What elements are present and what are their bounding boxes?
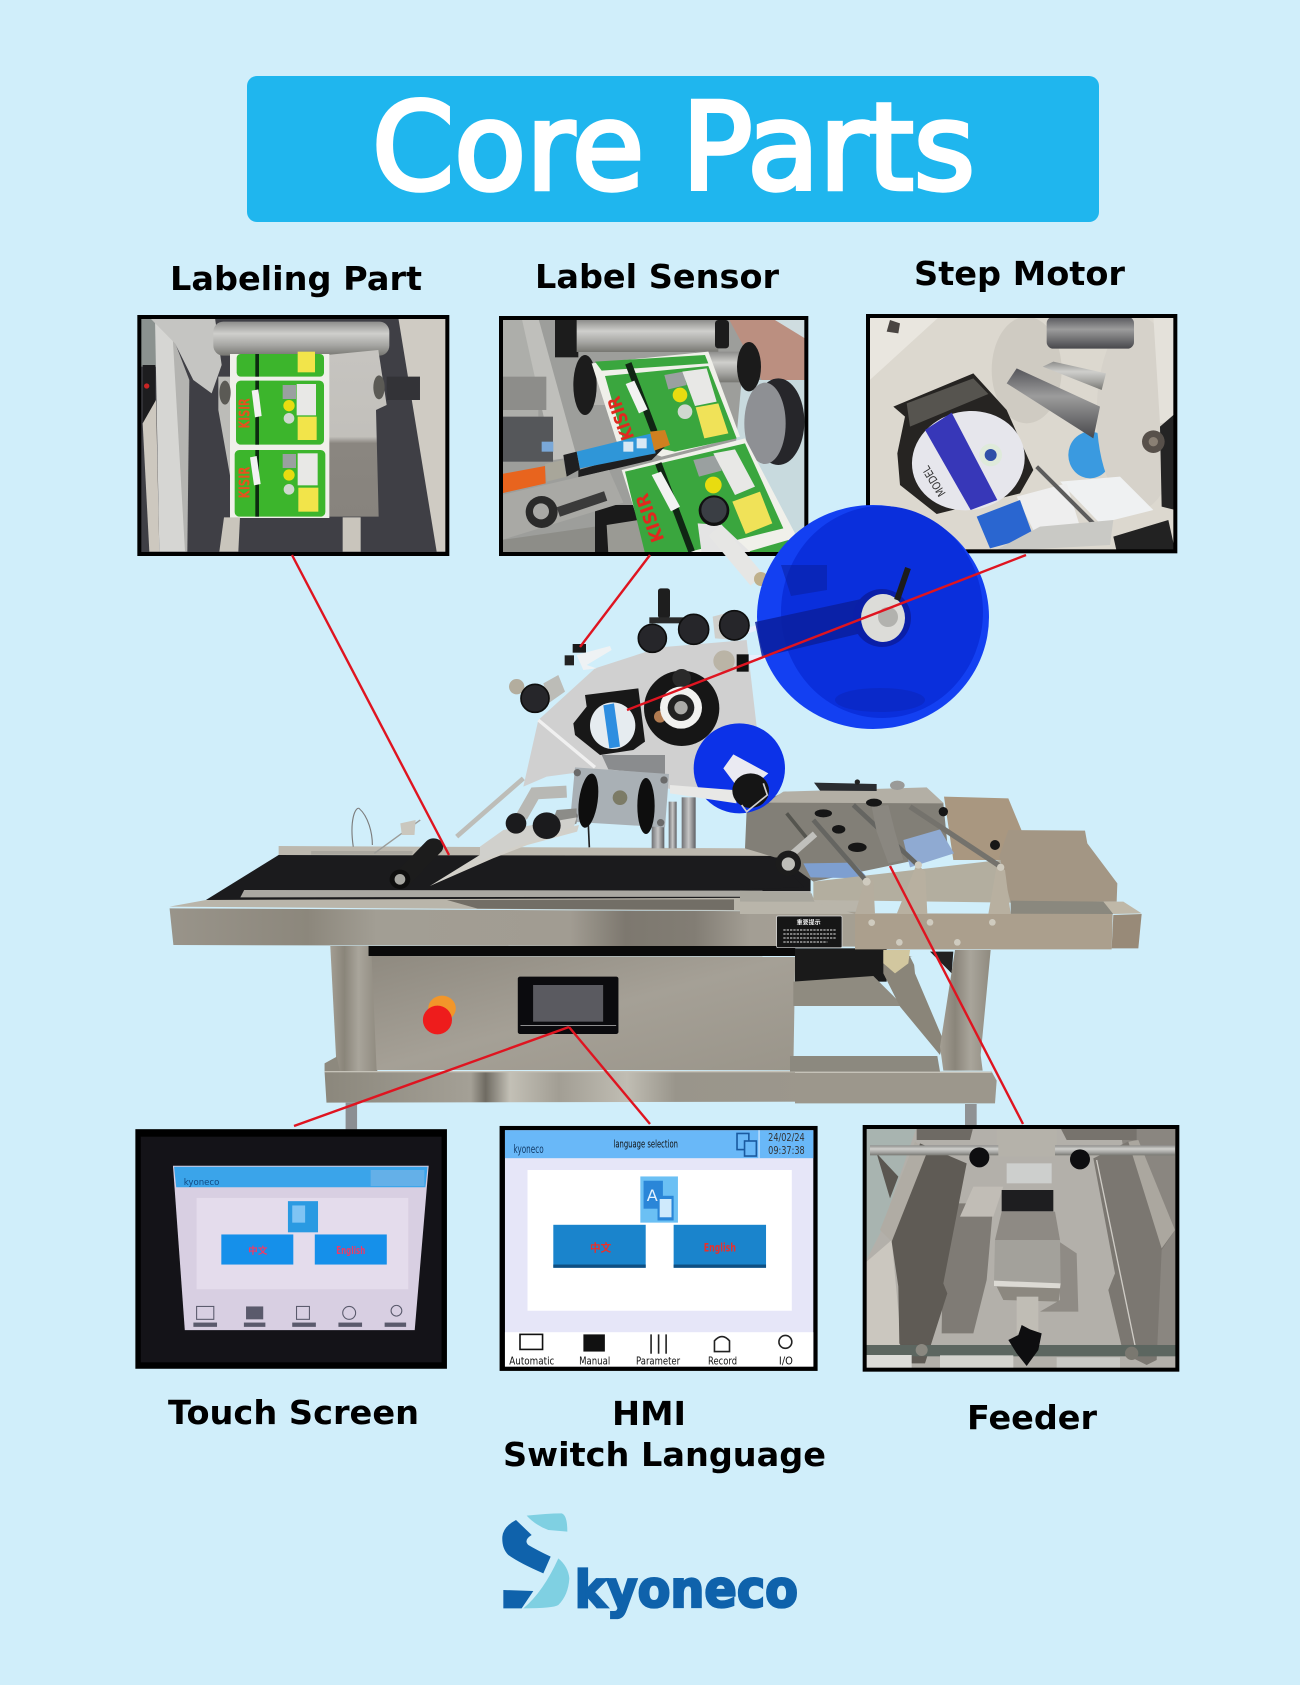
lower bracket bbox=[570, 767, 669, 834]
bottom nav bar: I/O bbox=[779, 1354, 793, 1367]
rollers bbox=[555, 318, 578, 357]
sensor strap knob bbox=[698, 523, 752, 553]
silver roller ends bbox=[713, 613, 728, 639]
title text: Core Parts bbox=[372, 79, 975, 218]
panel: touch screen photo bbox=[135, 1129, 447, 1369]
foot bbox=[965, 1104, 977, 1126]
button: Chinese: 中文 bbox=[248, 1245, 268, 1257]
panel: labeling part photo bbox=[139, 317, 447, 554]
top block bbox=[997, 1127, 1057, 1157]
end cap bbox=[1112, 914, 1142, 948]
screen brand: kyoneco bbox=[184, 1178, 219, 1188]
panel: label sensor photo: KISIR bbox=[632, 491, 669, 545]
document deck bbox=[803, 863, 868, 878]
big blue label reel bbox=[755, 505, 989, 729]
table and cabinet bbox=[170, 808, 860, 1129]
icon row bbox=[193, 1305, 406, 1327]
panel: labeling part photo: KISIR bbox=[236, 398, 253, 428]
bolts bbox=[219, 381, 231, 405]
leader lines bbox=[292, 555, 1026, 1126]
title banner bbox=[247, 76, 1099, 222]
bracket bbox=[502, 470, 623, 540]
hopper front bbox=[999, 830, 1117, 903]
labeling wedge bbox=[430, 825, 579, 886]
button: English: English bbox=[704, 1241, 736, 1255]
caption: Feeder: Feeder bbox=[967, 1398, 1098, 1437]
left leg bbox=[330, 946, 377, 1072]
feeder and frame bbox=[740, 779, 1142, 1126]
handle bbox=[1017, 1297, 1038, 1333]
white content panel bbox=[528, 1170, 792, 1311]
base bbox=[325, 1071, 812, 1103]
caption: HMI: HMI bbox=[612, 1394, 686, 1433]
button: Chinese: 中文 bbox=[590, 1242, 612, 1255]
base bars bbox=[865, 1345, 1177, 1356]
panel: label sensor photo bbox=[501, 318, 806, 554]
logo: Skyoneco bbox=[502, 1513, 798, 1619]
big disc bbox=[1098, 433, 1112, 472]
heading: Labeling Part: Labeling Part bbox=[170, 259, 422, 298]
foot bbox=[346, 1103, 357, 1129]
motor face bbox=[912, 411, 1025, 510]
feed wheel bbox=[776, 851, 801, 876]
label strap bbox=[715, 530, 768, 586]
button: Chinese bbox=[553, 1225, 646, 1268]
logo S mark bbox=[502, 1513, 569, 1608]
rollers bbox=[1047, 317, 1134, 349]
logo wordmark: kyoneco bbox=[575, 1560, 798, 1619]
table front bbox=[170, 908, 860, 947]
right guide bbox=[1093, 1141, 1175, 1365]
panel: HMI switch language bbox=[500, 1126, 818, 1371]
heading: Step Motor: Step Motor bbox=[914, 254, 1126, 293]
bottom nav bar: Parameter bbox=[636, 1354, 681, 1367]
screen header: language selection bbox=[613, 1137, 678, 1150]
long arm bbox=[457, 778, 523, 837]
blue reel inside bbox=[1068, 432, 1106, 478]
language icon: A bbox=[647, 1186, 658, 1205]
motor housing bbox=[893, 373, 1033, 514]
base bbox=[790, 1056, 940, 1072]
hopper rear bbox=[944, 797, 1022, 860]
machine touch screen bbox=[518, 977, 618, 1034]
metal plate bbox=[327, 350, 387, 517]
green label strip bbox=[230, 354, 329, 518]
screen header bbox=[505, 1130, 813, 1158]
panel: labeling part photo: KISIR bbox=[236, 467, 253, 498]
button: English: English bbox=[336, 1244, 365, 1257]
inner panel bbox=[197, 1198, 408, 1289]
panel: step motor photo bbox=[868, 316, 1180, 551]
screen header: 09:37:38 bbox=[768, 1144, 805, 1157]
right leg bbox=[940, 950, 991, 1071]
under table bbox=[795, 948, 887, 982]
screen header: kyoneco bbox=[514, 1142, 544, 1156]
feeder knob bbox=[1008, 1325, 1042, 1366]
drive wheel bbox=[644, 669, 719, 746]
sensor parts bbox=[565, 644, 612, 670]
button: English bbox=[315, 1234, 387, 1265]
feeder front rail bbox=[740, 902, 855, 914]
belt roller bbox=[402, 847, 434, 879]
pillars bbox=[652, 797, 696, 848]
mounting plate bbox=[523, 640, 757, 795]
panel: feeder photo bbox=[865, 1127, 1177, 1370]
screen header: 24/02/24 bbox=[768, 1131, 805, 1144]
panel: label sensor photo: KISIR bbox=[604, 393, 639, 443]
roller bbox=[213, 322, 389, 356]
feeder rods bbox=[787, 813, 808, 840]
heading: Label Sensor: Label Sensor bbox=[535, 257, 780, 296]
language icon bbox=[640, 1176, 678, 1223]
panel: step motor photo: MODEL bbox=[919, 463, 949, 499]
green label strip bbox=[592, 352, 740, 457]
button: English bbox=[674, 1225, 766, 1268]
wire bbox=[586, 825, 592, 847]
cabinet bbox=[369, 946, 795, 956]
reel hub bbox=[853, 568, 911, 647]
small blue reel bbox=[670, 723, 785, 813]
bottom nav bar: Manual bbox=[579, 1354, 610, 1367]
knobs bbox=[521, 611, 749, 712]
bottom dark area bbox=[595, 505, 637, 552]
guide plates bbox=[855, 879, 875, 914]
left guide bbox=[892, 1143, 967, 1363]
bottom nav bar: Automatic bbox=[509, 1354, 554, 1367]
emergency stop bbox=[428, 996, 456, 1021]
tray bbox=[1007, 1163, 1052, 1183]
sensor bbox=[563, 452, 580, 477]
under motor bracket bbox=[602, 755, 665, 775]
handle bbox=[658, 588, 670, 618]
button: Chinese bbox=[221, 1234, 293, 1265]
control panel bbox=[814, 783, 877, 791]
tape line bbox=[747, 603, 820, 633]
center shadows bbox=[942, 1203, 993, 1333]
bottom nav bar: Record bbox=[708, 1354, 737, 1367]
machine bbox=[170, 588, 1142, 1129]
belt and guide bbox=[1060, 477, 1153, 523]
wire guide bbox=[352, 808, 372, 847]
step motor bbox=[573, 688, 645, 755]
tube and knobs bbox=[480, 792, 577, 862]
belt guide strips bbox=[219, 517, 240, 552]
caption: Switch Language: Switch Language bbox=[503, 1435, 826, 1474]
idler bolt bbox=[713, 650, 735, 672]
labeling head bbox=[457, 588, 820, 862]
bottom nav bar bbox=[505, 1332, 813, 1367]
feeder housing bbox=[745, 792, 948, 882]
warning plate bbox=[777, 916, 842, 948]
caption: Touch Screen: Touch Screen bbox=[168, 1393, 419, 1432]
belt end bbox=[740, 857, 804, 889]
language icon bbox=[288, 1201, 318, 1232]
warning plate: 重要提示 bbox=[797, 919, 821, 927]
